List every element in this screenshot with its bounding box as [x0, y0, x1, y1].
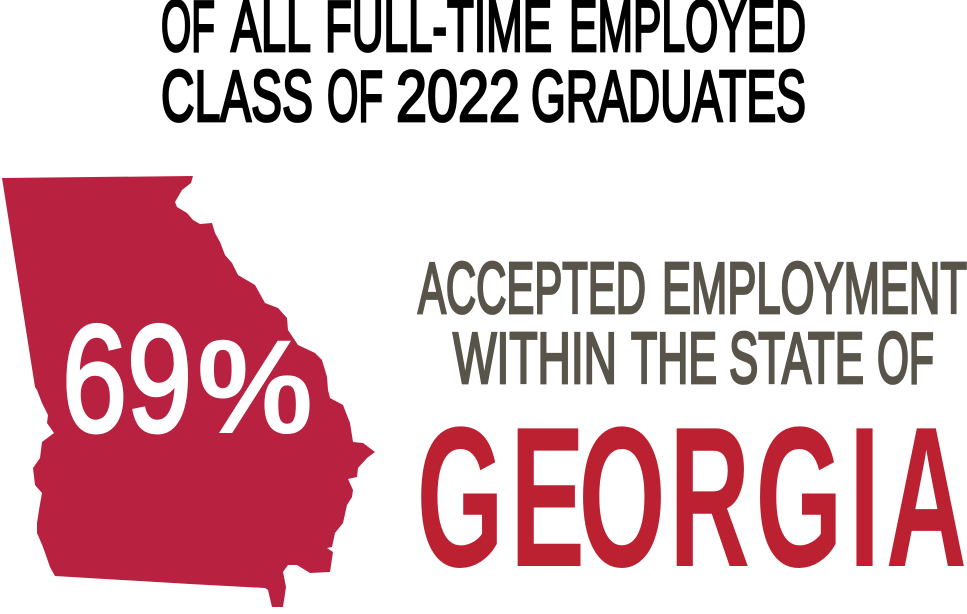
heading: of all full-time employed class of 2022 graduates: 2022 [396, 57, 520, 137]
text: accepted employment within the state of: THE [631, 319, 717, 399]
statistic: 69%: % [197, 313, 313, 462]
text: accepted employment within the state of: WITHIN [453, 319, 617, 399]
heading: of all full-time employed class of 2022 graduates [161, 0, 806, 137]
text: accepted employment within the state of: STATE [729, 319, 864, 399]
heading: of all full-time employed class of 2022 graduates: GRADUATES [531, 57, 806, 137]
statistic: 69% [62, 294, 313, 464]
text: accepted employment within the state of: ACCEPTED [418, 249, 646, 329]
map: state of Georgia with percentage [2, 176, 375, 607]
heading: of all full-time employed class of 2022 graduates: CLASS [161, 57, 313, 137]
statistic: 69%: 69 [62, 294, 192, 464]
text: Georgia: GEORGIA [417, 386, 967, 609]
text: accepted employment within the state of [418, 249, 967, 399]
heading: of all full-time employed class of 2022 graduates: OF [327, 57, 383, 137]
